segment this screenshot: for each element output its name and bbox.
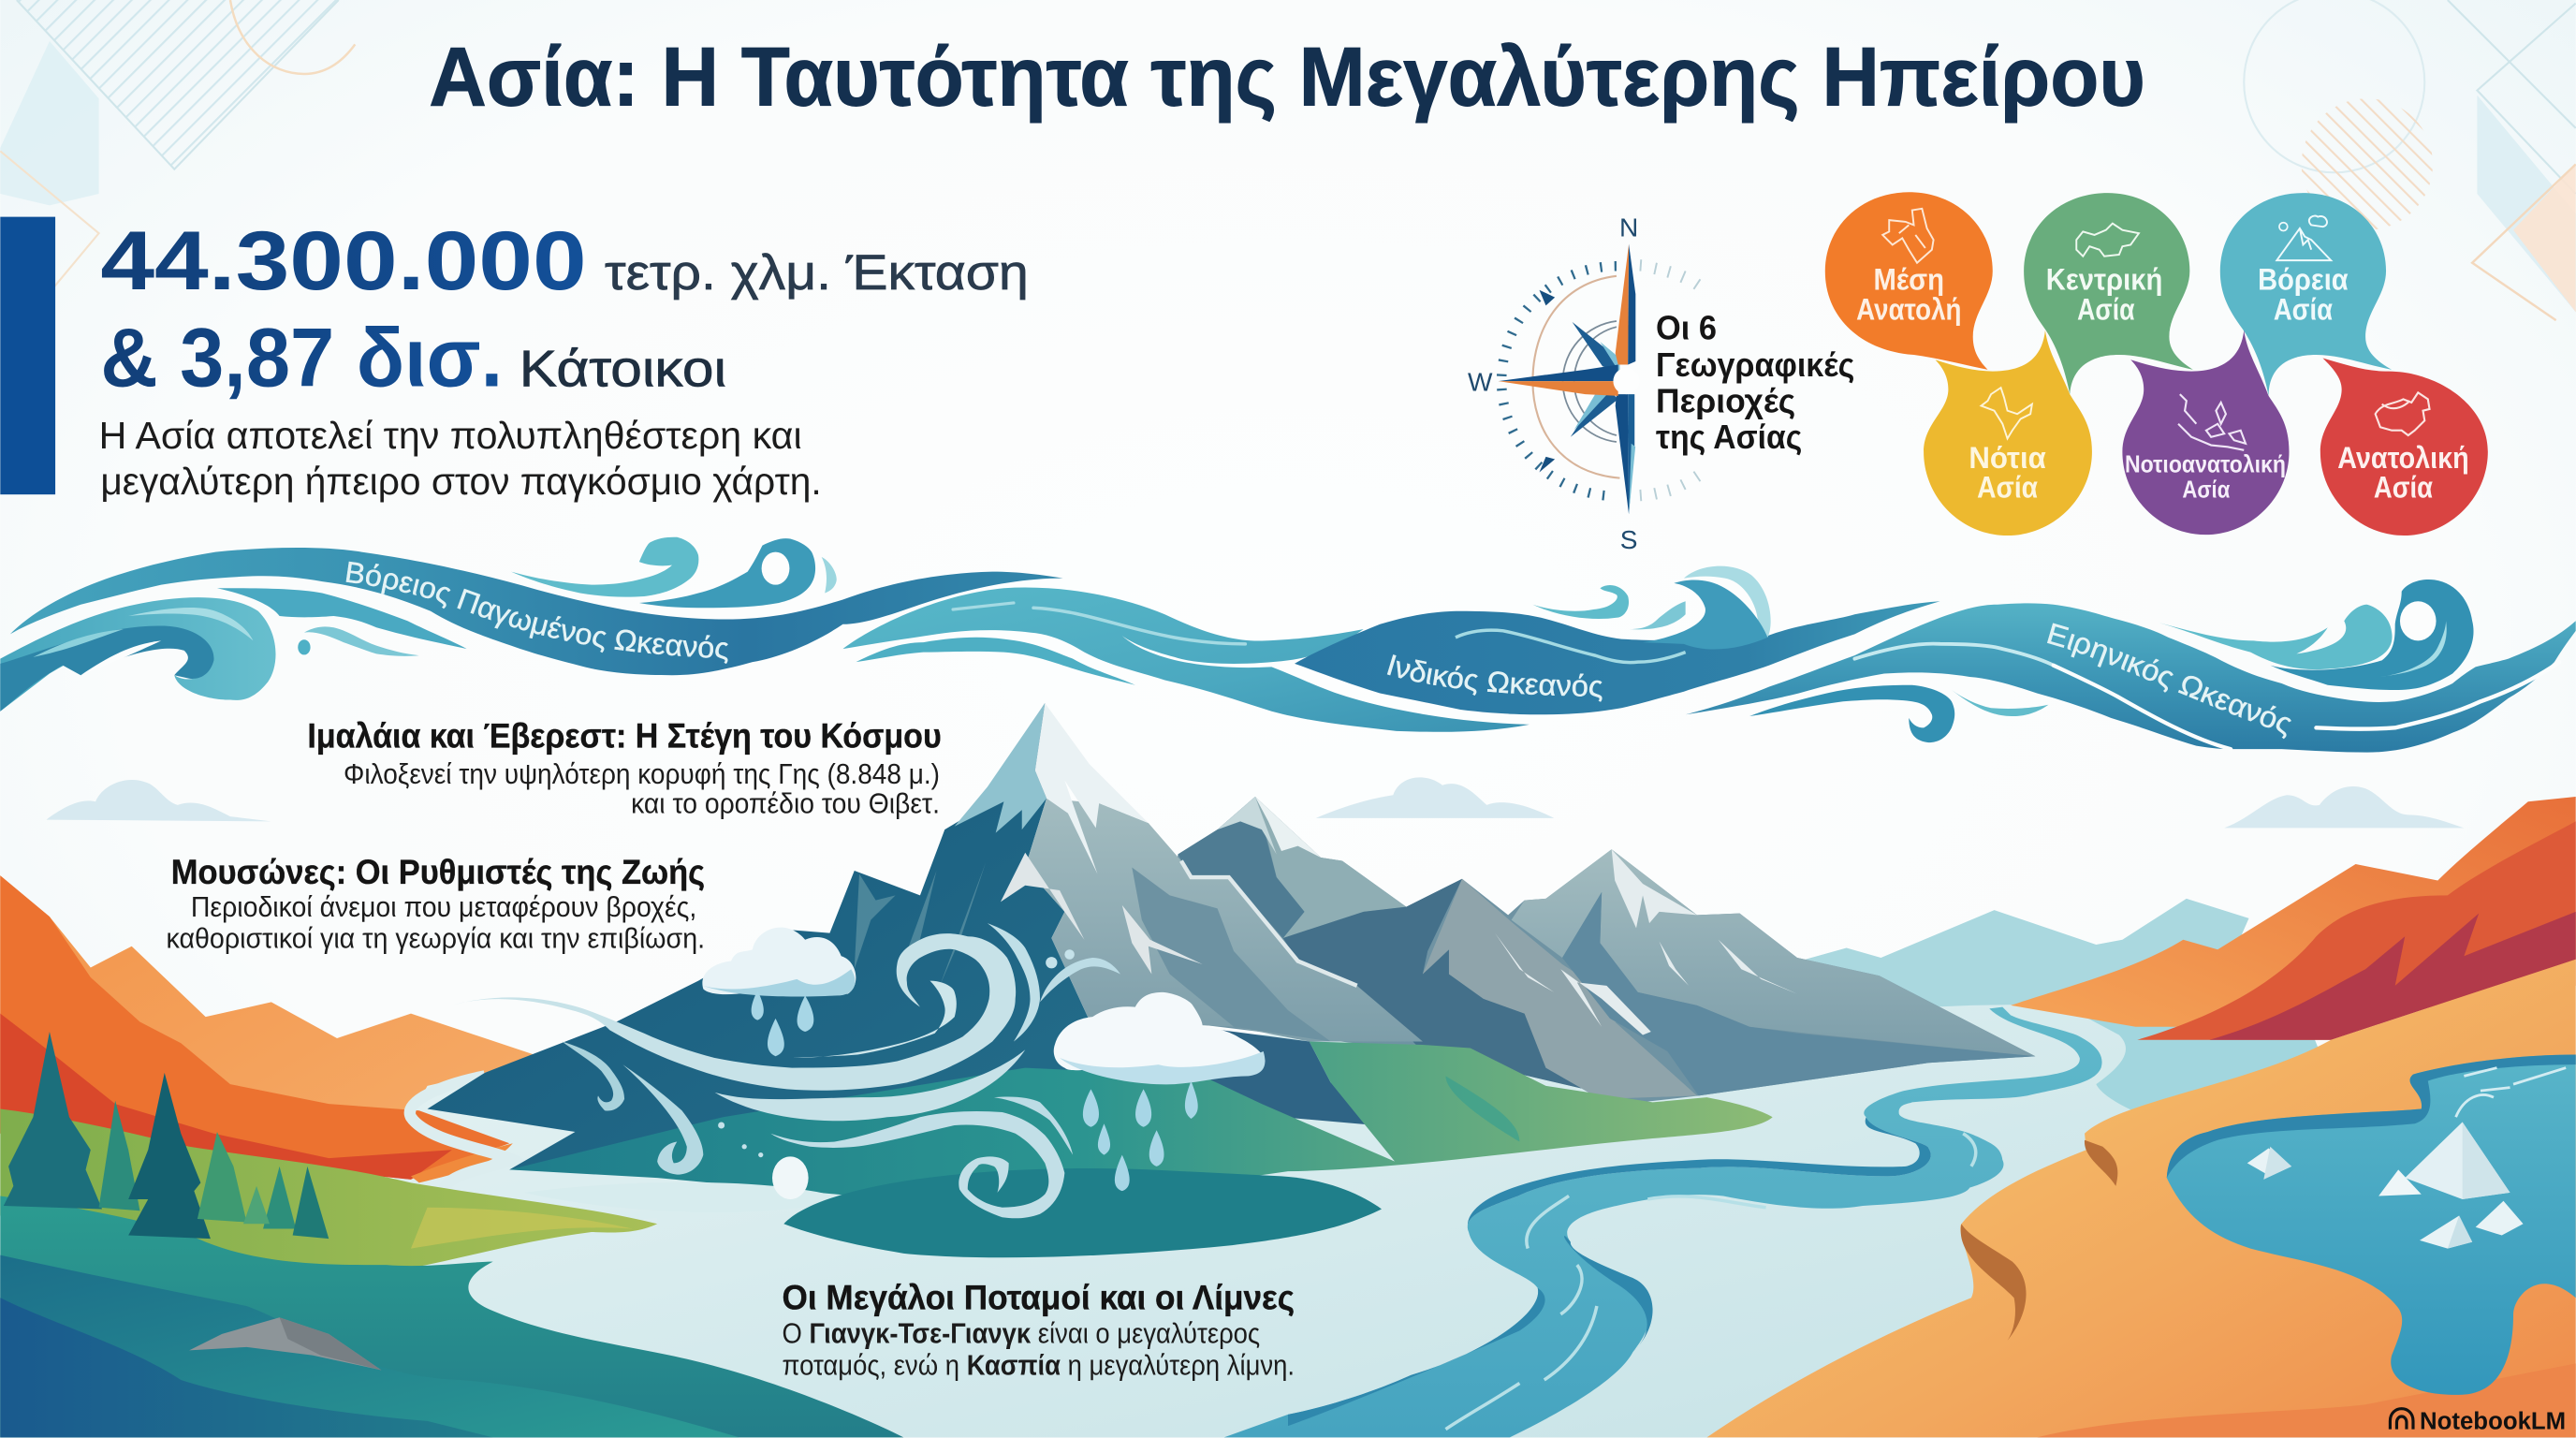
icon: Central Asia outline (2076, 224, 2139, 257)
left mid-orange (0, 875, 509, 1176)
ocean label: Arctic: Βόρειος Παγωμένος Ωκεανός (346, 562, 728, 664)
blob: Yellow South Asia: Νότια (1969, 441, 2046, 475)
rain drops (752, 990, 1198, 1191)
third peak mid face (1423, 879, 1697, 1099)
area label: τετρ. χλμ. Έκταση (605, 245, 1029, 301)
second peak dark face (1178, 797, 1305, 938)
river (1224, 1007, 2102, 1437)
Himalaya body (344, 757, 940, 820)
accent bar (0, 217, 55, 494)
blob: Red East Asia (2320, 359, 2488, 536)
inner ring (1563, 321, 1617, 442)
Himalaya body: και το οροπέδιο του Θιβετ. (631, 787, 940, 820)
population label: Κάτοικοι (520, 340, 726, 397)
under-ribbon streaks (217, 588, 467, 656)
compass hub (1613, 368, 1640, 394)
blob: Orange Middle East: Μέση (1874, 263, 1944, 297)
description (99, 414, 822, 503)
right orange mountains (2011, 797, 2576, 1027)
icon: snowy mountain and cloud (2276, 216, 2331, 260)
ridge highlight (1181, 860, 1357, 986)
snow patches (1495, 849, 1797, 1034)
text block: Himalaya (307, 716, 942, 820)
logo icon (2390, 1409, 2413, 1430)
river gap between hill and island (524, 1182, 848, 1212)
icon: India outline (1981, 388, 2032, 439)
dark valley (1283, 879, 1641, 1102)
Rivers body (783, 1316, 1295, 1382)
strait behind mountains (2070, 1002, 2333, 1134)
blob: Red East Asia: Ανατολική (2337, 441, 2469, 475)
swoosh B (715, 1049, 1025, 1121)
Monsoons body (167, 890, 705, 954)
right peak face (1512, 849, 2035, 1056)
lighter streaks on dark face (855, 862, 986, 986)
river plain (394, 1002, 2333, 1437)
cloud: left rain cloud (702, 928, 856, 997)
lower island (783, 1168, 1382, 1257)
blob: Teal North Asia: Βόρεια (2258, 263, 2349, 297)
Monsoons body: καθοριστικοί για τη γεωργία και την επιβίωση. (167, 921, 705, 954)
streak under band (1952, 690, 2048, 716)
right faint ticks (1640, 259, 1700, 501)
trees (4, 1032, 329, 1239)
compass letters (1468, 213, 1638, 554)
blob: Purple Southeast Asia: Νοτιοανατολική (2125, 451, 2286, 477)
swirl outer crescent (988, 923, 1040, 1041)
crest: Pacific wave (2159, 580, 2474, 690)
decoration: top-right geometric shapes (2244, 0, 2576, 320)
swirl inner curl (792, 981, 957, 1058)
sand (1706, 960, 2576, 1437)
logo: NotebookLM: NotebookLM (2420, 1407, 2566, 1435)
grey face inner shadow (1132, 867, 1331, 1041)
right peak lower face (1562, 892, 2035, 1095)
pale distant mountains (1806, 899, 2249, 1027)
title: Ασία: Η Ταυτότητα της Μεγαλύτερης Ηπείρου (429, 29, 2145, 123)
blob: Teal North Asia (2220, 193, 2392, 396)
population figure: & 3,87 δισ. (100, 310, 503, 404)
ribbon: Arctic (10, 548, 1063, 675)
pale snow-lit left face (955, 703, 1046, 833)
wave band: middle (842, 588, 1530, 732)
left red band (0, 1014, 452, 1180)
monsoon wind swirls (452, 923, 1120, 1218)
compass letters: S (1620, 525, 1637, 554)
north needle (1616, 244, 1629, 365)
left green meadow (0, 1108, 657, 1269)
third swirl crescent (994, 1096, 1073, 1155)
wave streak lower (856, 638, 1135, 685)
Pacific stripes (1854, 644, 2559, 749)
flick on grey slope (1040, 958, 1120, 1002)
panel: region blobs (1825, 192, 2488, 536)
ocean label: Pacific: Ειρηνικός Ωκεανός (2047, 624, 2291, 740)
heading: six regions: Γεωγραφικές (1656, 345, 1854, 384)
diagonal points (1573, 322, 1618, 372)
central dark face (428, 703, 1183, 1175)
compass (1468, 213, 1700, 554)
crest: Arctic waves (511, 537, 837, 608)
Monsoons body: Περιοδικοί άνεμοι που μεταφέρουν βροχές, (191, 890, 696, 923)
heading: six regions (1656, 308, 1854, 456)
south needle (1616, 394, 1629, 514)
third swirl (770, 1111, 1064, 1218)
foam dots (718, 949, 1075, 1157)
Rivers body: Ο Γιανγκ-Τσε-Γιανγκ είναι ο μεγαλύτερος (783, 1316, 1260, 1349)
Rivers body: ποταμός, ενώ η Κασπία η μεγαλύτερη λίμνη. (783, 1349, 1295, 1382)
Monsoons heading: Μουσώνες: Οι Ρυθμιστές της Ζωής (171, 853, 705, 891)
blob: Green Central Asia: Κεντρική (2046, 263, 2162, 297)
blob: Purple Southeast Asia: Ασία (2182, 477, 2231, 504)
right red mountains (2137, 821, 2576, 1040)
rock (189, 1317, 381, 1370)
blob: Yellow South Asia: Ασία (1977, 471, 2038, 505)
direction triangles (1539, 290, 1555, 305)
blob: Red East Asia: Ασία (2374, 471, 2433, 505)
blob: Yellow South Asia (1924, 330, 2092, 536)
lake (2167, 1055, 2576, 1395)
Himalaya body: Φιλοξενεί την υψηλότερη κορυφή της Γης (8.848 μ.) (344, 757, 940, 790)
foreground teal land (0, 1196, 903, 1437)
compass letters: W (1468, 368, 1493, 397)
crest: Indian wave (1532, 566, 1771, 649)
foreground dark layer (0, 1298, 493, 1437)
blob: Orange Middle East: Ανατολή (1856, 292, 1961, 326)
description: Η Ασία αποτελεί την πολυπληθέστερη και (99, 414, 802, 457)
Indian highlight (1456, 630, 1686, 663)
left river stream (410, 1076, 657, 1227)
wind ball (772, 1156, 809, 1199)
central green hill (509, 1041, 1773, 1196)
area figure: 44.300.000 (100, 213, 587, 307)
description: μεγαλύτερη ήπειρο στον παγκόσμιο χάρτη. (100, 460, 822, 503)
left orange hills (0, 875, 534, 1180)
hook low (622, 1064, 703, 1175)
panel: key statistics (0, 213, 1029, 503)
blob: Green Central Asia: Ασία (2077, 292, 2135, 326)
west needle (1499, 365, 1618, 381)
central grey face (1025, 799, 1423, 1041)
decoration: top-left geometric shapes (0, 0, 355, 292)
text block: Monsoons (167, 853, 705, 954)
icebergs (2247, 1068, 2566, 1249)
mountain range base (1150, 797, 2035, 1102)
blob: Purple Southeast Asia (2122, 330, 2290, 535)
cloud: right rain cloud (1054, 992, 1265, 1084)
thin hook (562, 1041, 624, 1111)
Himalaya heading: Ιμαλάια και Έβερεστ: Η Στέγη του Κόσμου (307, 716, 942, 755)
heading: six regions: Περιοχές (1656, 381, 1795, 419)
ocean wave band (0, 537, 2576, 753)
big swirl (452, 933, 1016, 1091)
sky clouds (46, 777, 2464, 828)
text block: Rivers (783, 1279, 1295, 1382)
wave highlights (953, 603, 1245, 644)
snow patches on main face (1001, 853, 1203, 975)
snow cap (1035, 703, 1149, 874)
heading: six regions: της Ασίας (1656, 418, 1802, 456)
blob: Green Central Asia (2024, 193, 2193, 394)
sand cliffs (1961, 1224, 2027, 1341)
second peak light face (1255, 797, 1406, 938)
compass tick ring (1501, 266, 1617, 496)
heading: six regions: Οι 6 (1656, 308, 1717, 346)
dark wedge under mountain (1051, 1027, 1395, 1127)
Rivers heading: Οι Μεγάλοι Ποταμοί και οι Λίμνες (783, 1279, 1295, 1317)
blob: Orange Middle East (1825, 192, 1993, 370)
hook under band (1749, 685, 1954, 742)
ocean label: Indian: Ινδικός Ωκεανός (1387, 654, 1603, 702)
compass letters: N (1619, 213, 1638, 242)
foreground mid layer (0, 1255, 739, 1437)
left curl (0, 597, 276, 712)
icon: archipelago (2178, 394, 2246, 450)
icon: Arabia outline (1882, 209, 1934, 263)
icon: China outline (2376, 392, 2430, 435)
ribbon: Indian (1295, 601, 1940, 714)
ribbon: Pacific (1686, 603, 2576, 753)
blob: Teal North Asia: Ασία (2274, 292, 2333, 326)
landscape (0, 703, 2576, 1437)
orange arc (1532, 276, 1619, 478)
